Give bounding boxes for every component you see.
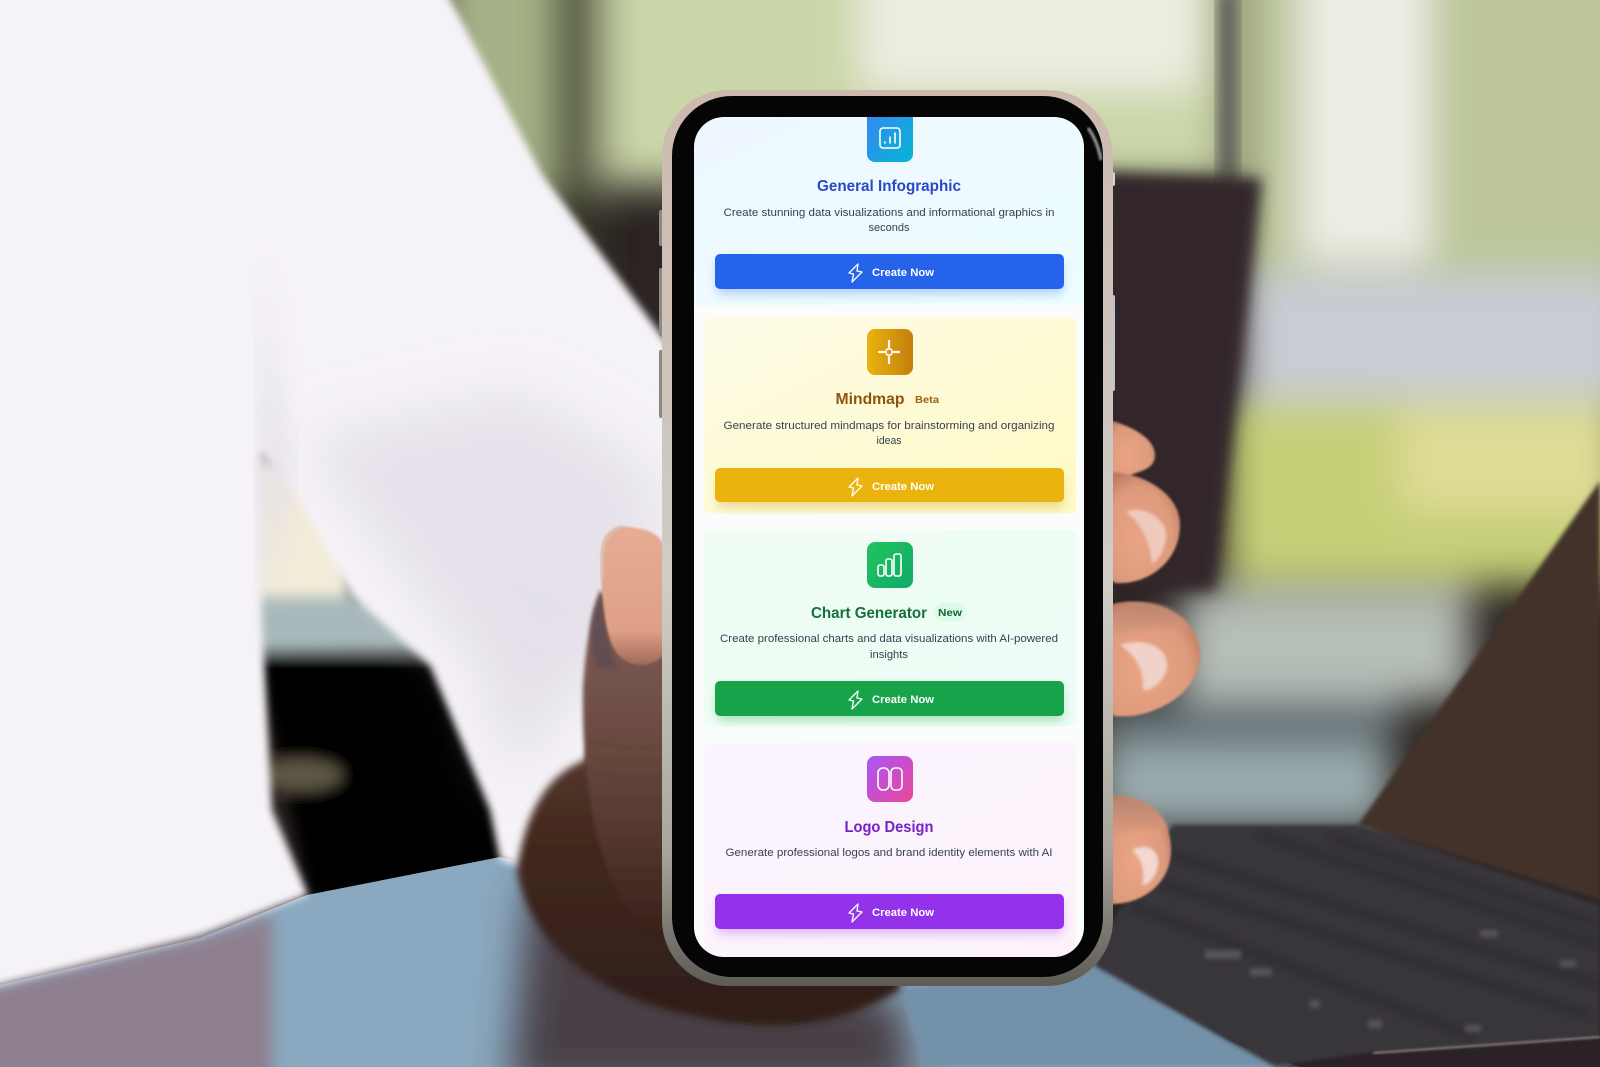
card: Logo Design: [704, 743, 1076, 957]
phone: [659, 90, 1115, 986]
description: Chart Generator: insights: [870, 649, 909, 661]
badge: Beta: Beta: [915, 395, 939, 406]
icon: crosshair sparkle: [867, 329, 913, 375]
card: Mindmap: [704, 317, 1076, 513]
description: Logo Design: Generate professional logos and brand identity elements with AI: [726, 847, 1052, 859]
hand: fingers on right side: [1097, 419, 1200, 904]
window mullion: [1218, 0, 1238, 190]
description: General Infographic: Create stunning data visualizations and informational graphics in: [724, 207, 1054, 219]
finger one: [1105, 419, 1180, 583]
button: Create Now (green): [715, 681, 1064, 716]
icon: three bars: [867, 542, 913, 588]
description: Chart Generator: Create professional charts and data visualizations with AI-powered: [720, 633, 1058, 645]
button: Create Now (yellow): Create Now: [872, 481, 934, 493]
hand: palm and thumb: [517, 526, 900, 1025]
finger two: [1097, 601, 1200, 716]
button: Create Now (blue): Create Now: [872, 267, 934, 279]
title: Chart Generator: Chart Generator: [811, 605, 927, 622]
keyboard: [1095, 825, 1600, 1067]
thumb tip: [601, 527, 667, 665]
phone screen: [694, 100, 1084, 957]
badge: New: New: [938, 608, 962, 619]
phone frame: [662, 90, 1113, 986]
table surface: [0, 857, 1300, 1067]
description: Mindmap: Generate structured mindmaps for brainstorming and organizing: [724, 420, 1054, 432]
button: Create Now (yellow): [715, 468, 1064, 502]
laptop screen back: [1358, 481, 1600, 900]
card: Chart Generator: [704, 530, 1076, 726]
finger three: [1105, 795, 1171, 904]
person: white shirt: [0, 0, 670, 990]
button: Create Now (green): Create Now: [872, 694, 934, 706]
button: Create Now (purple): [715, 894, 1064, 929]
icon: two capsules: [867, 756, 913, 802]
shirt sleeve shading: [300, 390, 660, 790]
side buttons: [659, 172, 1115, 418]
icon: bar chart in square: [867, 117, 913, 162]
title: General Infographic: General Infographic: [817, 178, 961, 195]
button: Create Now (purple): Create Now: [872, 907, 934, 919]
title: Mindmap: Mindmap: [836, 391, 905, 408]
button: Create Now (blue): [715, 254, 1064, 289]
background: dark chair: [1100, 172, 1262, 590]
card: General Infographic: [694, 100, 1084, 305]
title: Logo Design: Logo Design: [844, 819, 934, 836]
badge: New: [934, 603, 967, 621]
background: gap behind arm: [250, 460, 510, 905]
description: General Infographic: seconds: [868, 222, 910, 234]
description: Mindmap: ideas: [876, 435, 902, 447]
